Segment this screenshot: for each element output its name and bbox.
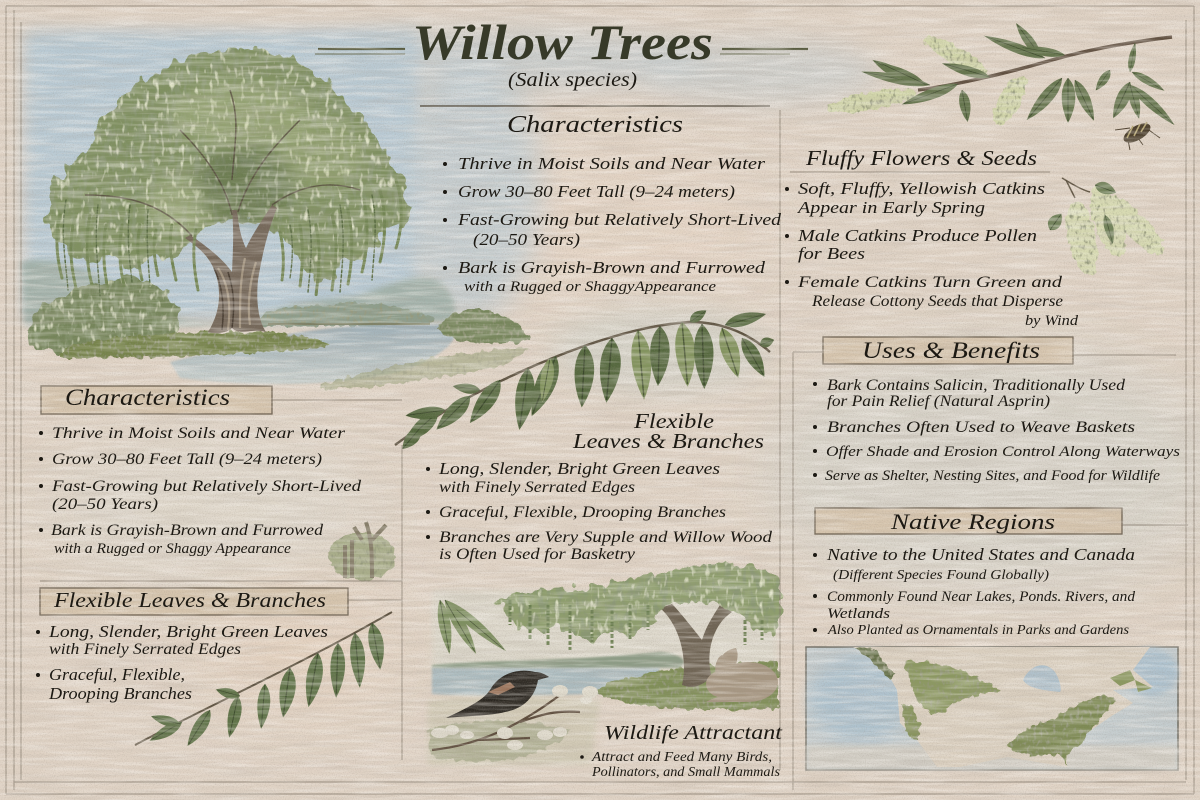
heading plank: flexible leaves (40, 588, 348, 615)
leaves (860, 20, 1178, 128)
hanging strands (510, 600, 762, 650)
heading rule (420, 105, 770, 107)
bullet list: Graceful, Flexible, Drooping Branches (439, 504, 726, 521)
subtitle: (Salix species) (508, 70, 637, 91)
bullet list: Serve as Shelter, Nesting Sites, and Food for Wildlife (825, 468, 1160, 484)
trunk bark (218, 258, 256, 330)
west coast range (902, 705, 920, 740)
bullet list: Branches Often Used to Weave Baskets (827, 419, 1135, 436)
heading: Characteristics (65, 385, 230, 410)
heading: Characteristics (507, 111, 683, 138)
illustration: wildlife scene (428, 564, 780, 765)
bullet list: with a Rugged or ShaggyAppearance (464, 279, 716, 295)
bee (1115, 119, 1160, 150)
bank (592, 660, 778, 710)
distant hills (22, 260, 455, 325)
heading plank: characteristics (41, 386, 272, 414)
bullet list: (20–50 Years) (473, 230, 580, 249)
bullet list: is Often Used for Basketry (439, 546, 635, 563)
bullet list: Fast-Growing but Relatively Short-Lived (51, 478, 362, 495)
bullet list: Bark Contains Salicin, Traditionally Used (827, 377, 1125, 394)
bullet list (39, 425, 362, 557)
bullet list: for Pain Relief (Natural Asprin) (827, 393, 1050, 410)
bullet list (443, 154, 782, 295)
scene haze (432, 590, 777, 670)
illustration: catkin branch with bee (825, 20, 1178, 150)
eastern US range (1008, 697, 1115, 765)
bullet list: Graceful, Flexible, (49, 665, 185, 684)
Labrador patches (1110, 670, 1152, 692)
bullet list: Wetlands (827, 606, 890, 622)
foliage (495, 564, 780, 639)
heading plank: native regions (815, 508, 1122, 534)
bullet list: Thrive in Moist Soils and Near Water (52, 425, 346, 442)
illustration: willow sprig lower left (135, 612, 392, 750)
native range map of North America (806, 647, 1178, 770)
far shore (432, 652, 684, 668)
illustration: willow tree by a river (22, 48, 530, 390)
branches (85, 90, 360, 236)
land (853, 647, 1153, 767)
bullet list: Drooping Branches (48, 684, 192, 703)
bullet list: Offer Shade and Erosion Control Along Waterways (826, 444, 1180, 460)
panel: uses and benefits (813, 338, 1180, 484)
bullet list: Pollinators, and Small Mammals (591, 765, 781, 780)
bullet list: (20–50 Years) (52, 496, 158, 513)
sky wash behind the title and tree (24, 30, 880, 395)
right shrub (438, 309, 530, 343)
Hudson Bay (1023, 665, 1061, 692)
Canadian range (905, 662, 1000, 714)
title: Willow Trees (412, 14, 713, 70)
bullet list: for Bees (798, 244, 865, 263)
bullet list (785, 179, 1079, 329)
bullet list: Thrive in Moist Soils and Near Water (458, 154, 765, 173)
heading: Native Regions (890, 509, 1055, 534)
bullet list: Long, Slender, Bright Green Leaves (48, 622, 328, 641)
heading: Fluffy Flowers & Seeds (805, 146, 1037, 170)
water (432, 668, 660, 696)
bullet list: Soft, Fluffy, Yellowish Catkins (798, 179, 1045, 198)
heading: Flexible Leaves & Branches (53, 588, 326, 612)
lower marsh (320, 348, 530, 390)
bullet list: Release Cottony Seeds that Disperse (811, 293, 1063, 310)
heading: Uses & Benefits (862, 338, 1040, 363)
heading (572, 409, 764, 453)
far-left sprig (435, 596, 510, 657)
catkin stem and leaves (1062, 178, 1090, 198)
catkin cluster (1060, 183, 1172, 278)
bullet list: Native to the United States and Canada (826, 545, 1135, 564)
panel: flexible leaves and branches (centre) (426, 409, 772, 563)
bullet list: with a Rugged or Shaggy Appearance (54, 541, 292, 557)
bullet list: Fast-Growing but Relatively Short-Lived (457, 210, 782, 229)
bullet list: Female Catkins Turn Green and (797, 274, 1063, 291)
panel: flexible leaves and branches (left) (36, 588, 328, 703)
bullet list: Attract and Feed Many Birds, (591, 750, 772, 765)
bullet list (426, 459, 772, 563)
bullet list: Long, Slender, Bright Green Leaves (438, 459, 720, 478)
trunk (660, 604, 732, 687)
tree line across the river (255, 302, 435, 326)
bullet list: Commonly Found Near Lakes, Ponds. Rivers, and (827, 589, 1136, 605)
rabbit (706, 648, 778, 702)
panel: characteristics (left) (39, 385, 362, 557)
bullet list (36, 622, 328, 703)
heading: Leaves & Branches (572, 429, 764, 453)
bird (446, 671, 549, 718)
bullet list: Male Catkins Produce Pollen (797, 226, 1037, 245)
panel: wildlife attractant (580, 722, 784, 780)
bullet list: with Finely Serrated Edges (439, 479, 635, 496)
river water (170, 324, 455, 384)
far bank (268, 323, 430, 325)
bullet list: Branches are Very Supple and Willow Wood (439, 529, 772, 546)
branch (918, 37, 1172, 90)
panel: native regions (813, 509, 1136, 637)
ground (428, 696, 600, 765)
bullet list: Grow 30–80 Feet Tall (9–24 meters) (52, 451, 322, 468)
bullet list: (Different Species Found Globally) (833, 568, 1049, 583)
ocean (806, 647, 1178, 770)
panel: fluffy flowers and seeds (785, 146, 1079, 329)
bullet list: Grow 30–80 Feet Tall (9–24 meters) (458, 182, 735, 201)
title flourishes (315, 49, 808, 54)
crown shading (170, 83, 310, 147)
bullet list: Appear in Early Spring (797, 198, 985, 217)
drooping strands (57, 180, 401, 296)
crown (46, 48, 410, 279)
bullet list: with Finely Serrated Edges (49, 641, 241, 658)
illustration: large willow branch (395, 306, 776, 453)
panel: characteristics (centre) (443, 111, 782, 295)
illustration: hanging catkins (1044, 178, 1172, 278)
bullet list: Also Planted as Ornamentals in Parks and Gardens (827, 622, 1129, 637)
heading: Flexible (633, 409, 715, 433)
heading plank: uses (823, 337, 1073, 364)
trunk (185, 205, 277, 333)
bullet list (580, 750, 781, 780)
illustration: small willow sketch (328, 522, 396, 580)
blossom branch (428, 685, 598, 762)
heading: Wildlife Attractant (604, 722, 784, 744)
bullet list: Bark is Grayish-Brown and Furrowed (51, 522, 324, 539)
grassy bank (62, 332, 330, 358)
bullet list: by Wind (1025, 313, 1079, 329)
bullet list (813, 377, 1180, 484)
catkins (825, 29, 1033, 129)
northwest coast (855, 647, 895, 680)
bullet list: Bark is Grayish-Brown and Furrowed (458, 258, 766, 277)
left shrubs (28, 277, 180, 353)
bullet list (813, 545, 1136, 637)
